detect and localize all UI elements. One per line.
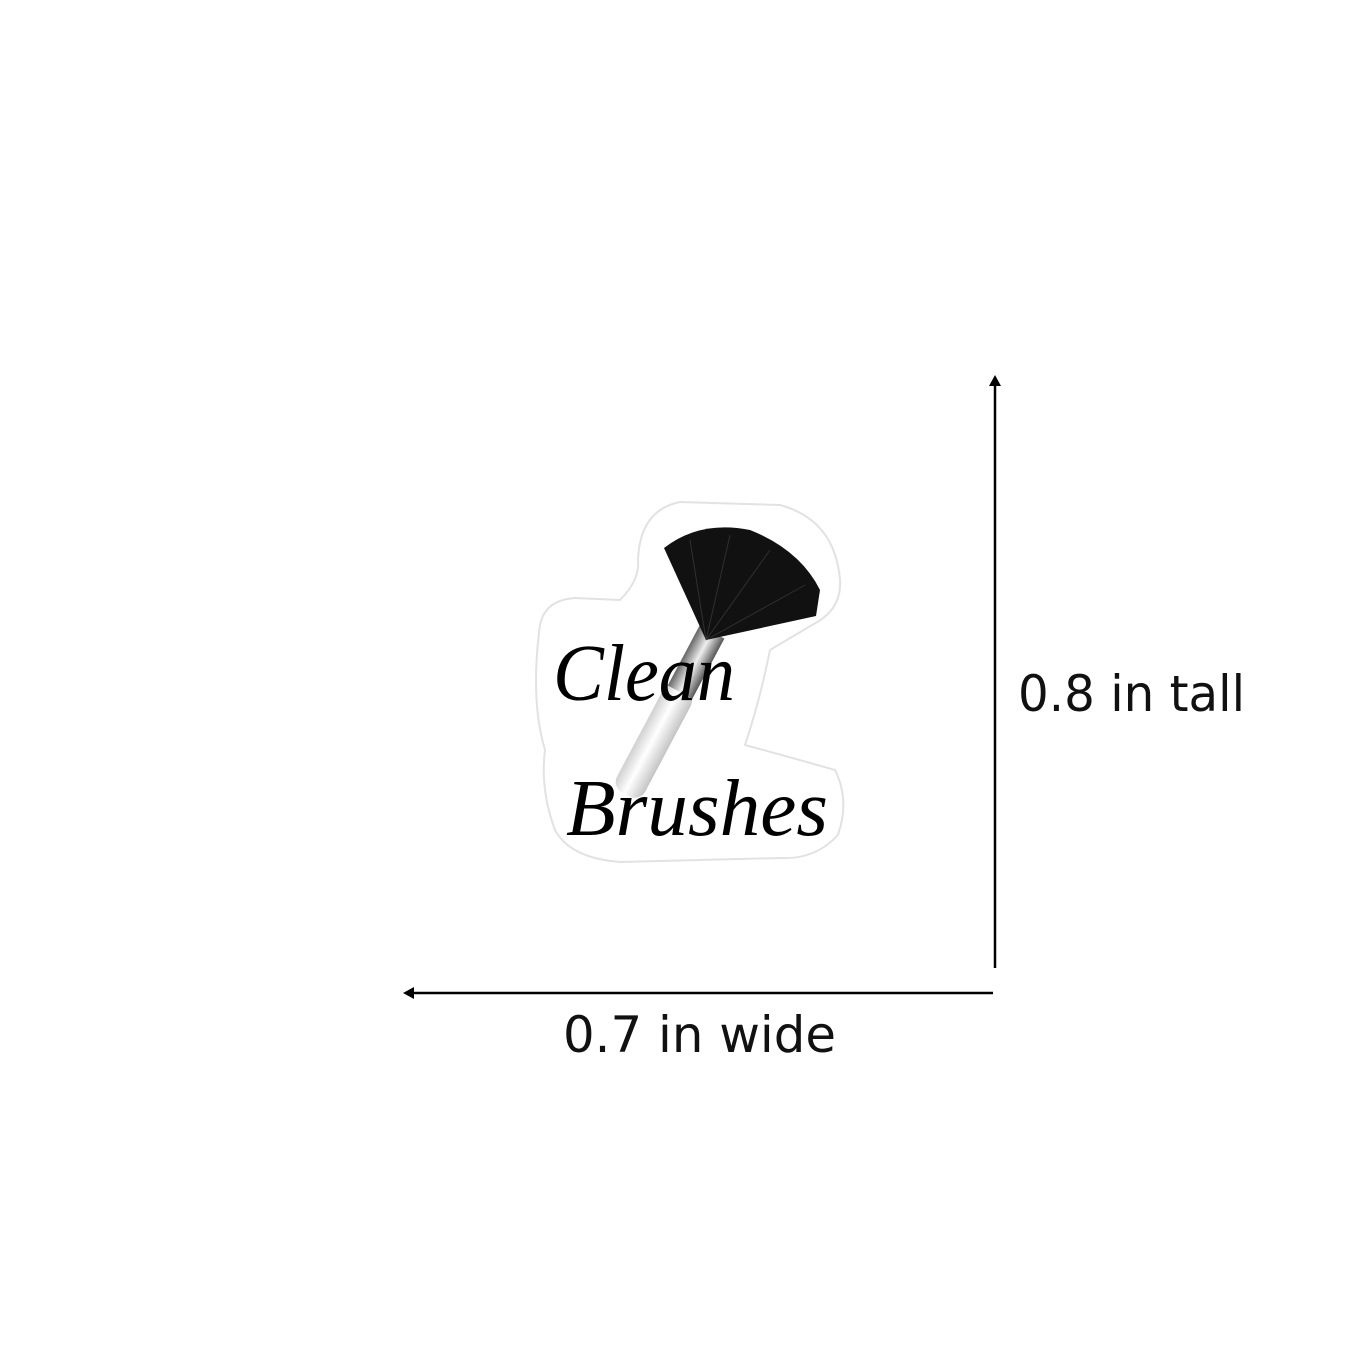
arrow: vertical height (989, 375, 1001, 968)
sticker text: Clean (553, 630, 735, 718)
sticker text (553, 630, 828, 853)
sticker outline (536, 502, 843, 862)
brush fan bristles (664, 527, 820, 640)
arrow: horizontal width (403, 987, 993, 999)
label: width: 0.7 in wide (563, 1006, 836, 1064)
brush handle (611, 624, 726, 802)
brush (611, 527, 820, 802)
label: height: 0.8 in tall (1018, 665, 1245, 723)
sticker text: Brushes (566, 765, 828, 853)
